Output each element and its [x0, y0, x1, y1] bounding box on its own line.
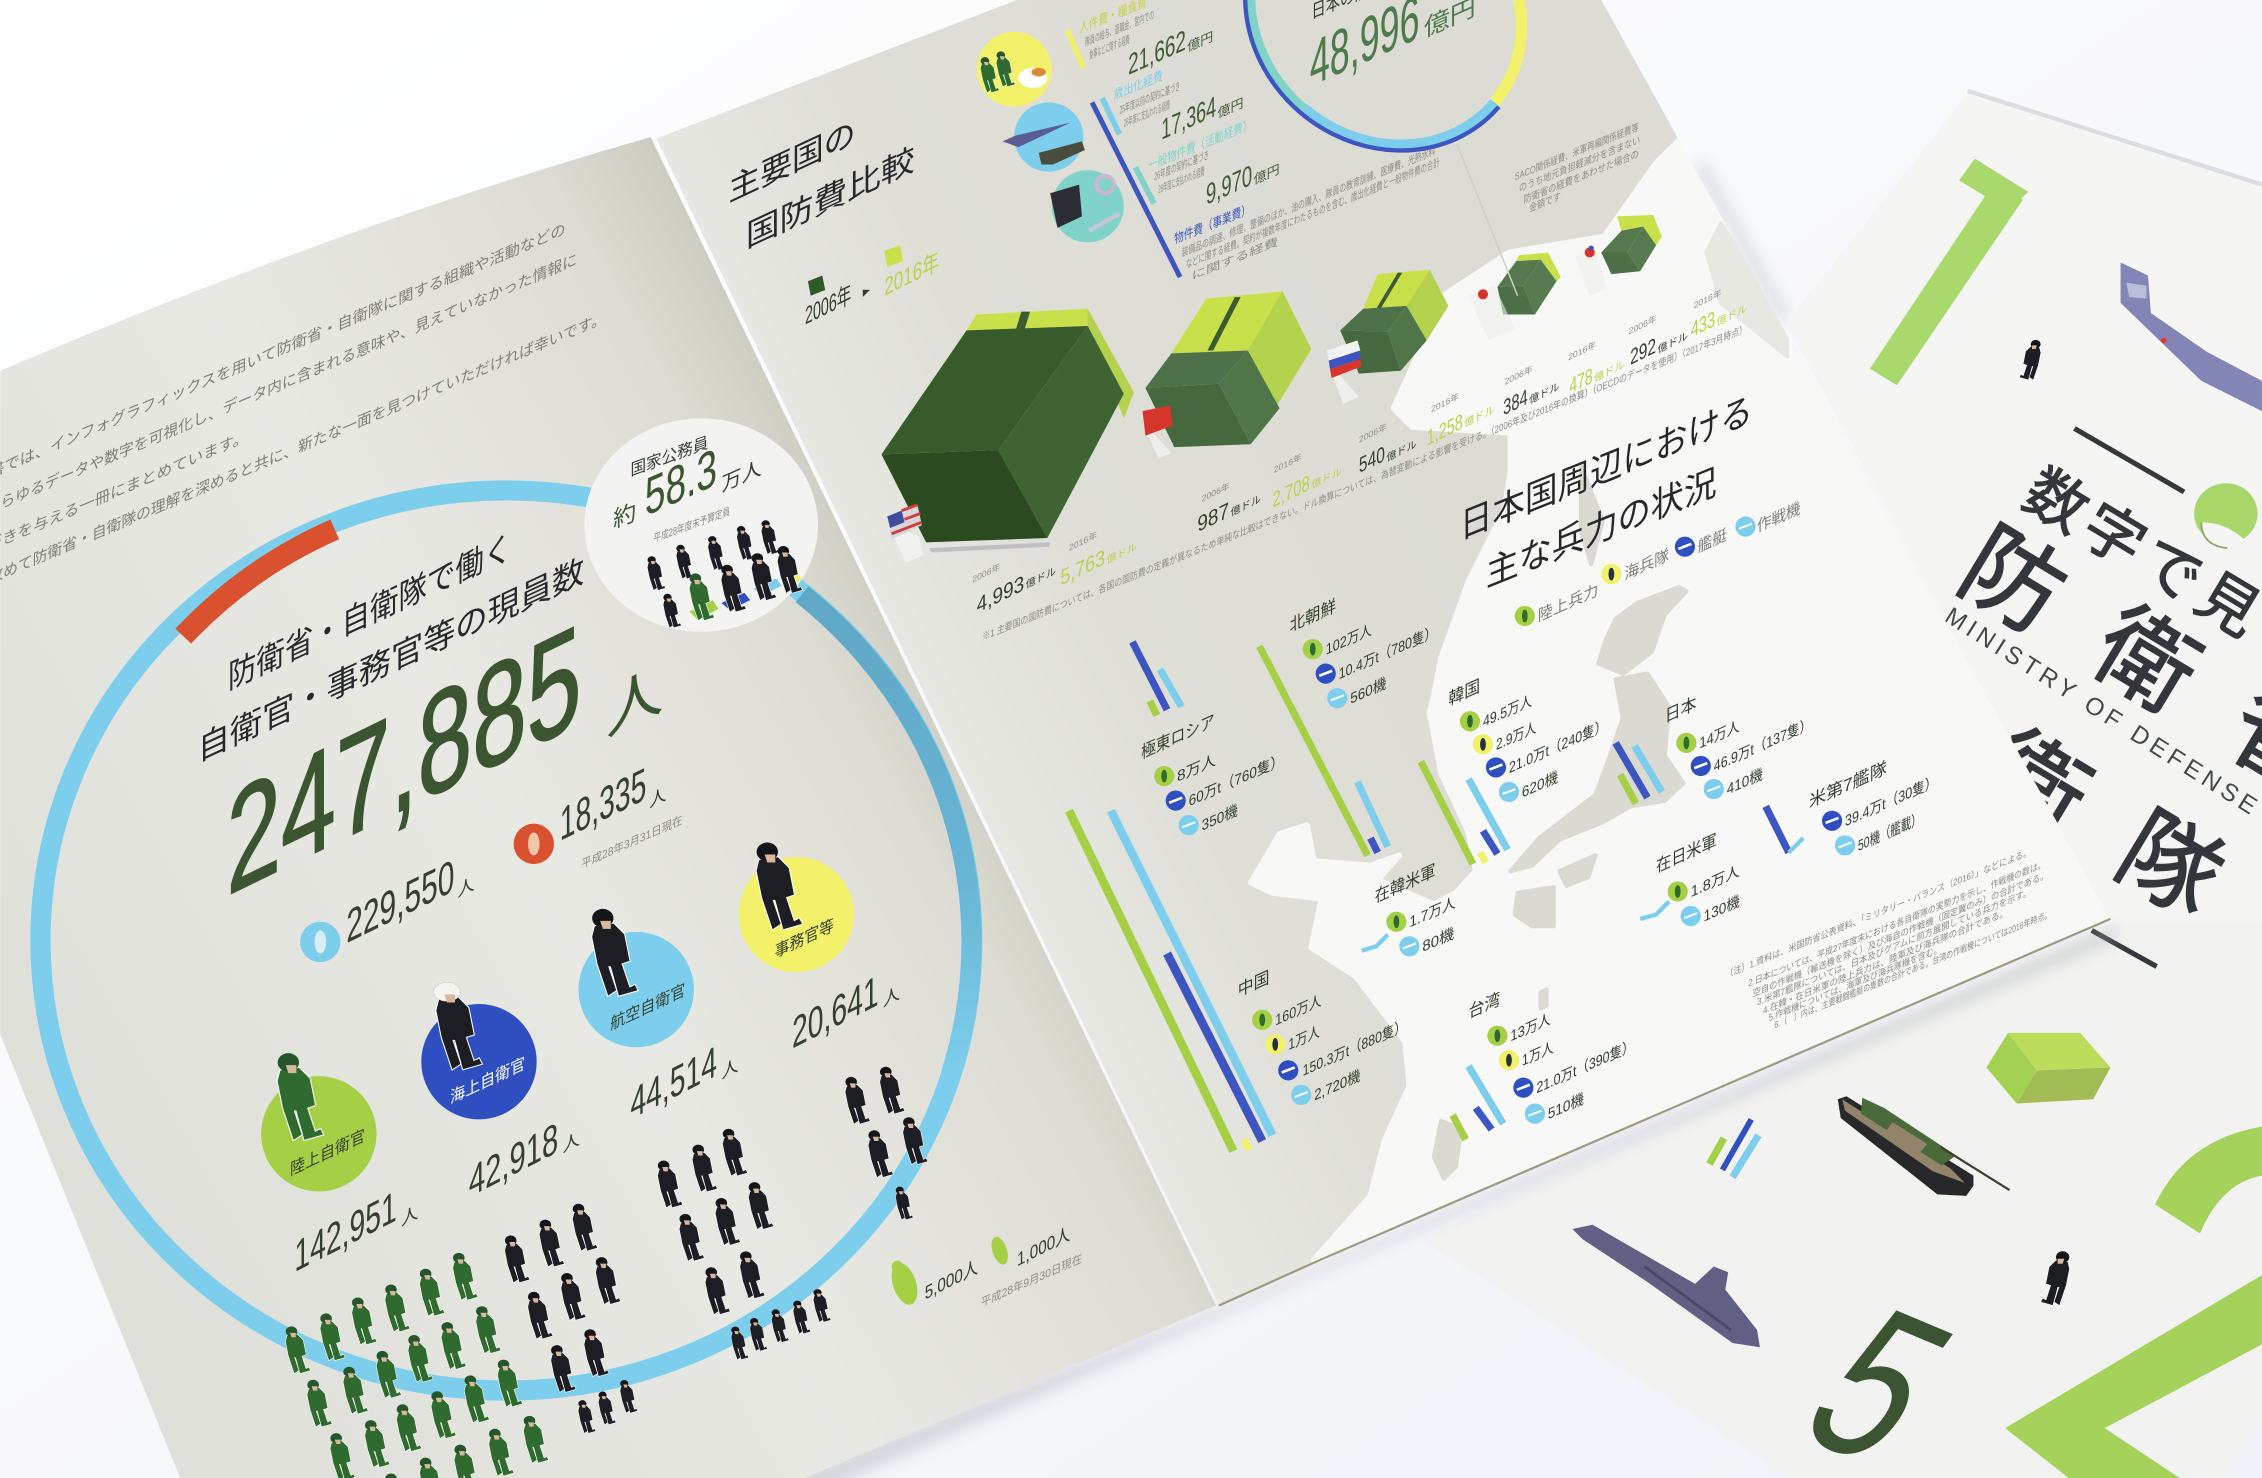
category: general supplies: 26年度に支払われる経費: [1158, 164, 1205, 196]
icons: budget categories: [977, 32, 1124, 242]
country spending labels: 1,258: [1427, 408, 1463, 450]
pictogram legend: [887, 1223, 1082, 1310]
country: China: 160万人: [1275, 993, 1322, 1029]
page shadow: [180, 926, 2118, 1478]
note: SACO costs: 防衛省の経費をあわせた場合の: [1523, 147, 1639, 206]
category: general supplies: 一般物件費（活動経費）: [1148, 117, 1252, 173]
green numeral fragment: [2005, 1127, 2262, 1478]
map: sea and coastline: [1251, 0, 2262, 1443]
service counts: 人: [721, 1054, 739, 1083]
icon: mini bars: [1709, 1119, 1758, 1177]
callout: national public servants: 58.3: [645, 436, 717, 528]
icon: staff figure: [2041, 1251, 2069, 1305]
country: US forces Korea: [1362, 861, 1456, 956]
heading: defence spending comparison: [729, 115, 915, 256]
country spending labels: 987: [1197, 497, 1229, 537]
country spending labels: 億ドル: [1311, 465, 1342, 492]
country spending labels: 2016年: [1069, 529, 1097, 553]
country spending labels: 292: [1630, 332, 1656, 370]
icon: submarine: [1572, 1225, 1760, 1347]
chart: Russia block: [1340, 270, 1448, 374]
callout: national public servants: 約: [613, 499, 636, 534]
civil staff count: 18,335: [560, 758, 646, 851]
legend: force types: 海兵隊: [1624, 546, 1669, 584]
country spending labels: 2006年: [1359, 421, 1387, 445]
category: general supplies: 9,970: [1206, 159, 1252, 212]
service counts: 人: [883, 982, 900, 1011]
maritime force: [421, 982, 537, 1119]
rule: [2074, 428, 2184, 966]
pictogram: air force: [658, 1129, 831, 1359]
service counts: 人: [401, 1201, 418, 1230]
country spending labels: [972, 287, 1747, 618]
callout: national public servants: 国家公務員: [630, 433, 708, 480]
service counts: 20,641: [792, 965, 879, 1058]
country: Russia Far East: 8万人: [1177, 752, 1216, 786]
heading: defence spending comparison: 国防費比較: [746, 142, 915, 256]
country spending labels: 4,993: [977, 570, 1024, 618]
footnote: force notes: 空自の作戦機（輸送機を除く）及び海自の作戦機（固定翼のみ）の合計である。: [1753, 868, 2048, 1000]
legend: force types: 陸上兵力: [1538, 580, 1598, 626]
category: general supplies: 26年度の契約に基づき: [1154, 148, 1209, 183]
country: Taiwan: 13万人: [1510, 1011, 1551, 1045]
country: Japan: [1616, 693, 1812, 803]
note: SACO costs: のうち地元負担軽減分を含まない: [1519, 133, 1640, 195]
legend: years: 2016年: [884, 247, 939, 301]
civil staff: [739, 843, 854, 972]
numeral 1: 1: [1756, 41, 2149, 492]
pictogram: ground force: [286, 1253, 548, 1478]
pictogram legend: 1,000人: [1017, 1223, 1070, 1271]
country: US Seventh Fleet: 39.4万t（30隻）: [1845, 772, 1937, 830]
icon: aircraft: [2121, 263, 2262, 411]
country spending labels: 億ドル: [1594, 358, 1625, 385]
country: Taiwan: 台湾: [1469, 989, 1500, 1022]
country spending labels: 2006年: [1629, 313, 1657, 337]
country spending labels: 億ドル: [1717, 302, 1747, 329]
icon: helmet: [2194, 483, 2258, 550]
country spending labels: 億ドル: [1106, 540, 1137, 567]
country: Japan: 日本: [1665, 693, 1696, 727]
country spending labels: 433: [1691, 306, 1715, 342]
maritime force: 海上自衛官: [450, 1053, 525, 1107]
heading: forces around Japan: [1460, 388, 1753, 595]
country: US forces Korea: 1.7万人: [1409, 895, 1456, 931]
country: Taiwan: 510機: [1548, 1090, 1584, 1123]
headline: 防衛省・自衛隊で働く: [228, 528, 512, 697]
country: China: 中国: [1238, 967, 1269, 1001]
country spending labels: 億ドル: [1026, 564, 1056, 591]
country: US forces Korea: 在韓米軍: [1375, 861, 1435, 907]
category: general supplies: [1148, 117, 1280, 212]
country: South Korea: 49.5万人: [1483, 693, 1532, 731]
note: SACO costs: [1515, 120, 1640, 215]
country spending labels: 384: [1503, 384, 1528, 420]
category: project costs: 物件費（事業費）: [1174, 201, 1251, 247]
uniformed count: 人: [457, 873, 475, 901]
country: South Korea: [1421, 676, 1607, 864]
country: North Korea: [1259, 596, 1437, 855]
pictogram legend: 5,000人: [925, 1256, 978, 1304]
panel: lower cover sheet: [1421, 923, 2262, 1478]
country: US Seventh Fleet: [1766, 758, 1937, 855]
country: South Korea: 620機: [1522, 768, 1558, 802]
icon: staff figure: [2020, 340, 2041, 380]
icon: green hex block: [1986, 1033, 2110, 1104]
country spending labels: 2016年: [1431, 390, 1459, 414]
air force: 航空自衛官: [610, 980, 685, 1034]
legend: years: [805, 245, 939, 330]
civil staff count: [514, 768, 682, 867]
service counts: 44,514: [630, 1036, 717, 1129]
total figure: 247,885: [227, 593, 581, 927]
civil staff count: 人: [649, 783, 667, 812]
panel: left page: [0, 137, 1216, 1478]
panel: upper cover sheet: [1699, 41, 2262, 967]
legend: years: 2006年: [805, 280, 851, 330]
country spending labels: 2016年: [1568, 339, 1596, 363]
icon: tank: [1838, 1096, 2009, 1196]
heading: defence spending comparison: 主要国の: [729, 115, 855, 210]
country: China: 1万人: [1288, 1024, 1320, 1054]
category: past-year contracts: 25年度以前の契約に基づき: [1119, 79, 1180, 117]
country: North Korea: 10.4万t（780隻）: [1339, 622, 1437, 683]
footnote: spending: ※1 主要国の国防費については、各国の国防費の定義が異なるため単純な比較はできない。ドル換算については、為替変動による影響を受ける。（2006年及び2016年の換算）（OECDのデータを使用）（2017年3月時点）: [982, 322, 1747, 643]
ring chart: defence budget: [1245, 0, 1521, 296]
country: China: [1069, 811, 1407, 1151]
legend: force types: [1515, 499, 1801, 626]
heading: forces around Japan: 日本国周辺における: [1460, 388, 1753, 547]
footnote: force notes: 4.在韓・在日米軍の陸上兵力は、陸軍及び海兵隊の合計である。: [1763, 905, 2008, 1017]
budget breakdown: [1068, 30, 1180, 277]
civil staff count: 平成28年3月31日現在: [581, 813, 682, 871]
service counts: [294, 965, 900, 1282]
country spending labels: 億ドル: [1386, 437, 1417, 464]
country spending labels: 億ドル: [1464, 403, 1495, 430]
service counts: 人: [563, 1128, 580, 1156]
chart: United States block: [881, 309, 1134, 552]
pictogram legend: 平成28年9月30日現在: [981, 1251, 1082, 1310]
country spending labels: 2016年: [1274, 451, 1302, 475]
country spending labels: 2006年: [972, 561, 1000, 585]
category: personnel: 食事などに関する経費: [1089, 32, 1130, 62]
uniformed count: 229,550: [346, 850, 454, 954]
panel: right page: [635, 0, 2262, 1443]
country spending labels: 億ドル: [1231, 492, 1261, 519]
total figure: [230, 626, 662, 894]
country spending labels: 2,708: [1272, 470, 1310, 512]
country spending labels: 2006年: [1505, 363, 1532, 387]
country: Japan: 14万人: [1699, 718, 1740, 752]
legend: years: ▸: [863, 281, 870, 301]
category: project costs: に関する経費: [1192, 234, 1278, 283]
headline: 自衛官・事務官等の現員数: [198, 552, 584, 769]
service counts: 142,951: [294, 1181, 397, 1282]
footnote: force notes: [1725, 845, 2051, 1031]
country: US Seventh Fleet: 50機（艦載）: [1858, 809, 1921, 855]
cover title: [1833, 456, 2262, 967]
country spending labels: 億ドル: [1529, 380, 1560, 407]
country: Taiwan: 21.0万t（390隻）: [1536, 1036, 1634, 1097]
chart: China block: [1145, 291, 1311, 447]
note: SACO costs: 金額です: [1529, 190, 1561, 215]
country spending labels: 2016年: [1694, 287, 1721, 311]
country: Japan: 410機: [1727, 765, 1763, 799]
country: South Korea: 21.0万t（240隻）: [1509, 716, 1607, 777]
footnote: force notes: 6.（ ）内は、主要戦闘艦艇の隻数の合計である。台湾の作戦機については2016年時点。: [1774, 907, 2051, 1031]
uniformed count: [300, 850, 475, 962]
total figure: 人: [606, 656, 664, 748]
category: personnel: [1079, 0, 1213, 82]
country: Russia Far East: 350機: [1202, 801, 1238, 835]
country: Taiwan: 1万人: [1522, 1039, 1554, 1070]
callout: national public servants: 平成28年度末予算定員: [654, 504, 730, 545]
page edge: [1219, 919, 2110, 1305]
country: South Korea: 韓国: [1448, 676, 1480, 709]
heading: forces around Japan: 主な兵力の状況: [1486, 461, 1717, 595]
footnote: force notes: 5.作戦機については、海軍及び海兵隊機を含む。: [1769, 942, 1942, 1024]
footnote: force notes: 2.日本については、平成27年度末における各自衛隊の実勢力を示し、作戦機の数は、: [1748, 857, 2046, 990]
category: project costs: 装備品の調達、修理、整備のほか、油の購入、隊員の教育訓練、医療費、光熱水料: [1181, 144, 1435, 260]
numeral 1: [1870, 158, 2028, 385]
country: Taiwan: [1453, 989, 1634, 1140]
icon: equipment and tools: [1050, 170, 1124, 242]
country spending labels: 540: [1359, 441, 1385, 478]
country: North Korea: 560機: [1350, 674, 1386, 708]
country: China: 150.3万t（880隻）: [1303, 1017, 1407, 1080]
chart: South Korea block: [1601, 215, 1662, 274]
service circles: [261, 843, 854, 1192]
note: SACO costs: SACO関係経費、米軍再編関係経費等: [1515, 120, 1639, 183]
intro paragraph: 改めて防衛省・自衛隊の理解を深めると共に、新たな一面を見つけていただければ幸いです。: [0, 309, 606, 588]
footnote: force notes: （注）1.資料は、米国防省公表資料、「ミリタリー・バランス（2016）」などによる。: [1725, 845, 2031, 981]
country: Russia Far East: [1132, 642, 1284, 835]
intro paragraph: あらゆるデータや数字を可視化し、データ内に含まれる意味や、見えていなかった情報に: [0, 250, 577, 519]
country spending labels: 2006年: [1202, 480, 1230, 504]
callout: national public servants: 万人: [721, 457, 762, 497]
country: US Seventh Fleet: 米第7艦隊: [1809, 758, 1887, 812]
category: past-year contracts: 歳出化経費: [1114, 68, 1163, 102]
country spending labels: 5,763: [1060, 544, 1105, 590]
country: Japan: 46.9万t（137隻）: [1714, 715, 1812, 776]
category: past-year contracts: 17,364: [1161, 91, 1216, 147]
category: general supplies: 億円: [1254, 162, 1280, 188]
legend: force types: 作戦機: [1757, 499, 1801, 536]
country: US forces Japan: [1640, 830, 1740, 926]
category: past-year contracts: 26年度に支払われる経費: [1124, 98, 1170, 130]
country: Russia Far East: 60万t（760隻）: [1189, 751, 1284, 810]
pictogram: civil staff: [845, 1067, 928, 1220]
country: North Korea: 北朝鮮: [1290, 596, 1336, 636]
icon: flags: [887, 246, 1607, 563]
legend: force types: 艦艇: [1698, 525, 1727, 556]
country: US forces Japan: 1.8万人: [1691, 863, 1740, 901]
country spending labels: 億ドル: [1658, 329, 1688, 356]
service counts: 42,918: [469, 1112, 558, 1207]
country: US forces Korea: 80機: [1422, 925, 1454, 956]
map: islands: [1434, 224, 1787, 1179]
icon: personnel and food: [977, 32, 1052, 107]
country: US forces Japan: 130機: [1704, 892, 1740, 926]
chart: Japan block: [1497, 252, 1561, 314]
footnote: force notes: 3.米第7艦隊については、日本及びグアムに前方展開している兵力を示す。: [1757, 885, 2031, 1008]
callout: national public servants: [584, 418, 818, 632]
category: past-year contracts: 億円: [1218, 95, 1244, 121]
ring chart: personnel: [40, 490, 972, 1391]
category: personnel: 億円: [1187, 29, 1213, 55]
category: project costs: [1174, 144, 1440, 283]
category: personnel: 21,662: [1128, 25, 1186, 82]
country spending labels: 478: [1570, 363, 1593, 399]
country: US forces Japan: 在日米軍: [1656, 830, 1717, 877]
civil staff: 事務官等: [775, 915, 834, 962]
category: project costs: などに関する経費。契約が複数年度にわたるものを含む、歳出化経費と一般物件費の合計: [1186, 155, 1440, 271]
country: South Korea: 2.9万人: [1496, 720, 1536, 754]
country: North Korea: 102万人: [1326, 622, 1372, 659]
air force: [579, 909, 694, 1047]
pictogram: maritime force: [505, 1204, 637, 1433]
icon: aircraft and tank: [1003, 102, 1085, 172]
country: China: 2,720機: [1314, 1067, 1360, 1104]
cover title: MINISTRY OF DEFENSE: [1940, 603, 2261, 820]
ground force: 陸上自衛官: [290, 1125, 365, 1179]
ground force: [261, 1053, 377, 1192]
country: Russia Far East: 極東ロシア: [1141, 711, 1215, 763]
